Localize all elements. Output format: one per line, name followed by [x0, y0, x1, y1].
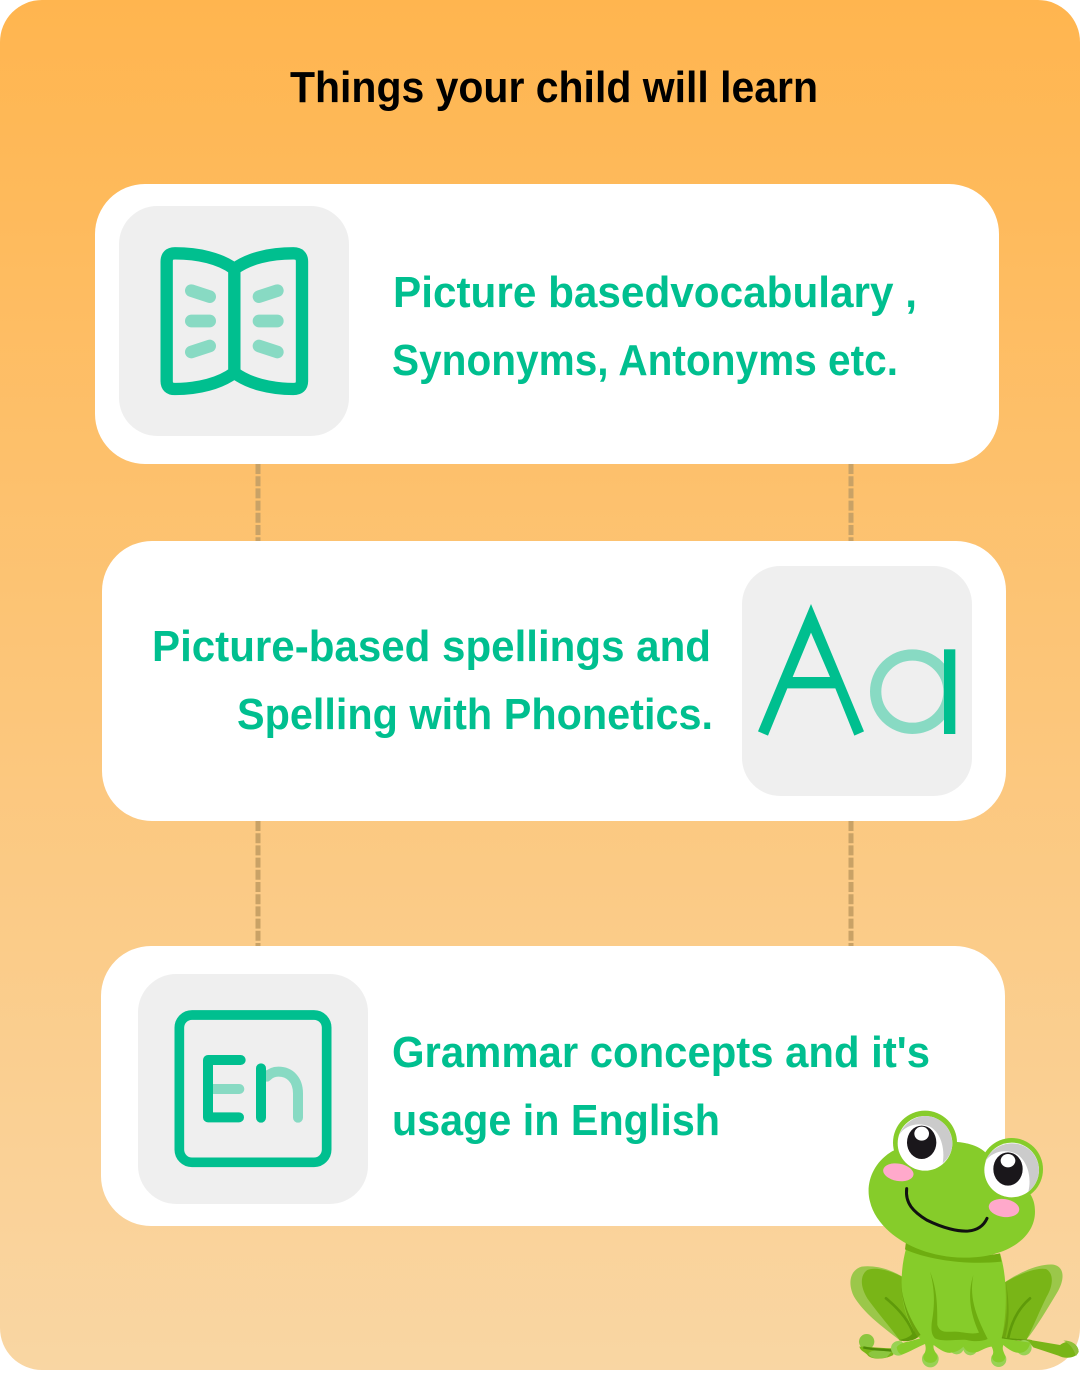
- frog belly folds: [930, 1272, 988, 1341]
- frog body: [897, 1247, 1030, 1363]
- text: grammar: usage in English: [392, 1096, 720, 1145]
- frog cheeks: [882, 1161, 1020, 1219]
- frog neck: [905, 1242, 1001, 1263]
- icon: Aa letters: [742, 566, 972, 796]
- illustration: frog: [850, 1111, 1079, 1367]
- text: vocabulary: Synonyms, Antonyms etc.: [392, 336, 898, 385]
- connectors: [258, 464, 851, 946]
- frog eyes: [893, 1111, 1043, 1201]
- text: vocabulary: Picture basedvocabulary ,: [393, 268, 917, 317]
- frog smile: [906, 1189, 987, 1231]
- text: spelling: Picture-based spellings and: [152, 622, 711, 671]
- panel: grammar: [101, 946, 1005, 1226]
- icon: open book: [119, 206, 349, 436]
- text: grammar: Grammar concepts and it's: [392, 1028, 930, 1077]
- text: spelling: Spelling with Phonetics.: [237, 690, 713, 739]
- frog head: [869, 1142, 1035, 1258]
- text: vocabulary: [392, 268, 917, 385]
- panel: vocabulary: [95, 184, 999, 464]
- frog feet: [859, 1334, 1079, 1367]
- title: Things your child will learn: [290, 63, 818, 112]
- text: grammar: [392, 1028, 930, 1145]
- text: spelling: [152, 622, 713, 739]
- panel: spelling: [102, 541, 1006, 821]
- icon: En box: [138, 974, 368, 1204]
